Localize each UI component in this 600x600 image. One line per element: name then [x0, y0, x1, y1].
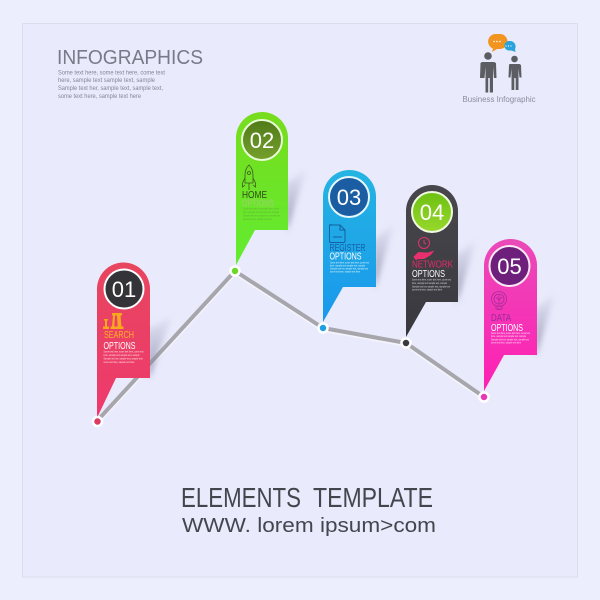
pin 05: data options [484, 239, 537, 391]
number badge 03 [329, 177, 369, 217]
small body text: some text here, sample text here [491, 340, 521, 344]
pin 02: home options [236, 112, 288, 265]
dot 5 [480, 392, 488, 402]
small body text: some text here, sample text here [412, 288, 442, 292]
small body text: Some text here, some text here, come text [104, 350, 144, 354]
pin body [236, 112, 288, 265]
label: home options: HOME [242, 190, 267, 201]
number badge 04: 04 [420, 200, 444, 225]
number badge 05: 05 [497, 254, 522, 279]
small body text: Sample text her, sample text, sample text [491, 338, 529, 342]
number badge 05 [490, 246, 530, 286]
label: register options: OPTIONS [330, 252, 362, 262]
number badge 03: 03 [337, 185, 361, 210]
small body text: Sample text her, sample text, sample text [104, 356, 143, 360]
small body text: Sample text her, sample text, sample text [412, 284, 450, 288]
connector line chart [97, 271, 484, 422]
small body text: here, sample text sample text, sample [412, 281, 447, 285]
pin body [323, 170, 376, 322]
label: network options [412, 260, 453, 280]
label: search options: OPTIONS [104, 341, 136, 352]
number badge 04 [412, 192, 452, 232]
pin 03: register options [323, 170, 376, 322]
footer url: WWW. lorem ipsum>com [182, 515, 436, 537]
small body text: here, sample text sample text, sample [104, 353, 140, 357]
small body text: some text here, sample text here [243, 217, 272, 221]
small body text: here, sample text sample text, sample [243, 210, 279, 214]
label: network options: NETWORK [412, 260, 453, 270]
number badge 02 [242, 120, 282, 160]
pin body [484, 239, 537, 391]
icon: business people with speech bubbles [462, 34, 536, 104]
small body text [412, 278, 451, 292]
label: register options: REGISTER [330, 243, 366, 254]
footer title: elements template: TEMPLATE [313, 482, 433, 513]
small body text: here, sample text sample text, sample [491, 334, 526, 338]
icon: document [330, 224, 345, 242]
header body text: here, sample text sample text, sample [58, 77, 156, 84]
small body text: Some text here, some text here, come text [330, 260, 369, 264]
small body text: Sample text her, sample text, sample text [243, 214, 280, 218]
dot 1 [93, 417, 102, 426]
label: network options: OPTIONS [412, 269, 445, 280]
small body text [243, 206, 280, 221]
header body text [58, 70, 165, 100]
dot 2 [230, 266, 240, 276]
small body text: Some text here, some text here, come text [491, 331, 530, 335]
small body text: here, sample text sample text, sample [330, 264, 365, 268]
icon: blue speech bubble [504, 41, 516, 52]
header body text: some text here, sample text here [58, 93, 142, 100]
small body text: Some text here, some text here, come text [412, 278, 451, 282]
header text block [57, 47, 203, 100]
pin body [97, 262, 150, 418]
label: search options [104, 330, 136, 352]
header body text: Some text here, some text here, come text [58, 70, 165, 76]
label: search options: SEARCH [104, 330, 134, 341]
pin 04: network options [406, 185, 458, 337]
icon: hand holding clock [414, 238, 433, 260]
number badge 02: 02 [250, 128, 274, 153]
icon: light bulb [492, 292, 506, 310]
label: home options [242, 190, 274, 210]
pin shadows [146, 170, 555, 379]
header body text: Sample text her, sample text, sample text, [58, 85, 163, 92]
chart node dots [93, 266, 488, 426]
dot 4 [402, 338, 410, 348]
pin 01: search options [97, 262, 150, 418]
footer title: elements template: ELEMENTS [181, 482, 301, 513]
footer title: elements template [181, 482, 433, 513]
small body text [491, 331, 530, 344]
number badge 01: 01 [112, 277, 136, 302]
icon: chess tower [103, 313, 124, 329]
small body text [330, 260, 369, 274]
heading: infographics: INFOGRAPHICS [57, 47, 203, 69]
icon: tall person [480, 52, 496, 92]
label: register options [330, 243, 366, 262]
label: home options: OPTIONS [242, 198, 274, 210]
pin body [406, 185, 458, 337]
label: data options: OPTIONS [491, 323, 523, 334]
small body text: some text here, sample text here [330, 270, 360, 274]
dot 3 [318, 324, 328, 332]
label: data options: DATA [491, 313, 511, 324]
small body text: Some text here, some text here, come [243, 206, 279, 210]
small body text [104, 350, 144, 364]
number badge 01 [104, 270, 144, 308]
icon: short person [508, 56, 522, 90]
label: data options [491, 313, 523, 334]
icon: orange speech bubble [488, 34, 508, 52]
small body text: Sample text her, sample text, sample text [330, 266, 368, 270]
icon: rocket [242, 165, 256, 190]
caption: business infographic: Business Infographic [462, 95, 536, 104]
small body text: some text here, sample text here [104, 360, 135, 364]
